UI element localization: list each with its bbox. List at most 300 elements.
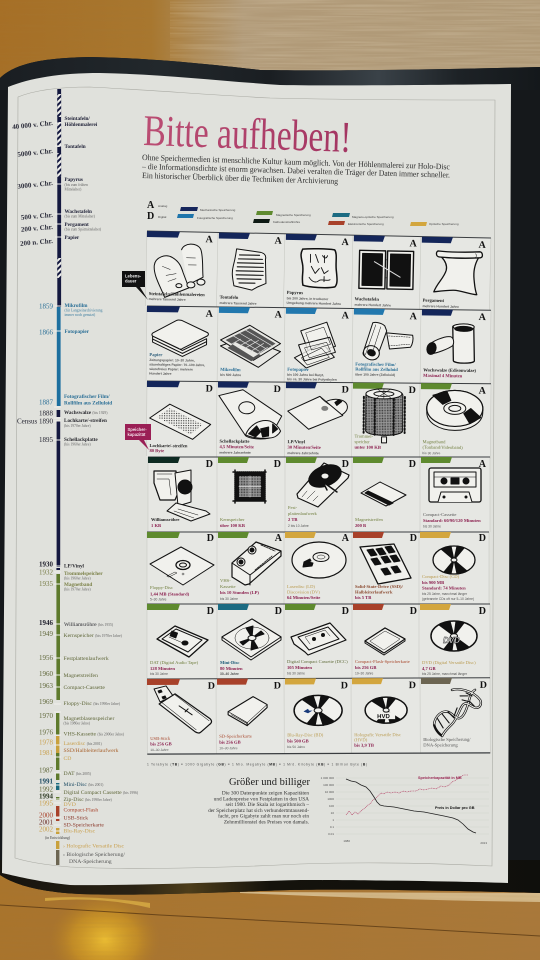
label: bis 10 Stunden (LP) xyxy=(220,590,259,595)
legend: analog and digital keys: D xyxy=(147,211,154,222)
timeline media labels: (bis zum Mittelalter) xyxy=(64,214,96,218)
card: Fotografischer Film xyxy=(353,309,418,377)
label: über 100 KB xyxy=(220,523,245,528)
timeline media labels: Wachstafeln xyxy=(64,209,92,215)
panel: row 1 cards xyxy=(145,231,491,314)
timeline media labels: (bis zum frühen xyxy=(64,183,88,187)
card: DVD: D xyxy=(479,606,486,617)
card: Magnetstreifen: D xyxy=(409,459,416,470)
label: Wachswalze (Edisonwalze) xyxy=(423,367,476,373)
icon: holographic disc xyxy=(365,697,407,723)
card: Wachswalze xyxy=(421,309,487,379)
card: Papyrus xyxy=(285,234,350,306)
card: Tontafeln xyxy=(218,232,283,306)
card: Festplatte: D xyxy=(342,459,349,470)
timeline media labels: Laserdisc (bis 2001) xyxy=(64,741,103,747)
price series xyxy=(346,779,476,833)
card: Wachstafeln xyxy=(352,235,418,308)
label: Trommel- xyxy=(355,434,373,439)
card: SD xyxy=(217,679,281,750)
card: Floppy: D xyxy=(207,533,214,544)
label: mehrere Jahrzehnte xyxy=(219,451,251,455)
line chart: capacity and price xyxy=(321,775,489,845)
icon: paper stack xyxy=(152,320,209,357)
chart description text: und Ladenpreise von Festplatten in den USA xyxy=(214,796,309,802)
label: Standard: 60/90/120 Minuten xyxy=(423,518,481,523)
label: HVD logo: HVD xyxy=(377,714,390,720)
label: DAT (Digital Audio Tape) xyxy=(150,660,198,665)
timeline dates, 19th and 20th century: 2000 xyxy=(39,812,54,820)
label: LP/Vinyl xyxy=(288,439,305,444)
chart description text: Die 300 Datenpunkte zeigen Kapazitäten xyxy=(222,790,309,796)
label: 128 Minuten xyxy=(150,666,175,671)
card: Kernspeicher xyxy=(218,457,281,528)
card: LP/Vinyl xyxy=(285,382,349,456)
card: VHS: A xyxy=(275,533,283,544)
label: Biologische Speicherung/ xyxy=(423,737,471,742)
chart gridlines and axis labels: 0.01 xyxy=(328,832,334,836)
timeline dates, 19th and 20th century: 1995 xyxy=(39,800,54,808)
timeline dates, 19th and 20th century: 1992 xyxy=(39,786,54,794)
label: bis 30 Jahre xyxy=(150,672,168,676)
label: Compact-Cassette xyxy=(423,512,456,517)
timeline media labels: Schellackplatte xyxy=(64,437,98,443)
chart gridlines and axis labels: 100 000 xyxy=(323,783,334,787)
card: Kernspeicher: D xyxy=(274,459,281,470)
chart gridlines and axis labels: 0.1 xyxy=(330,825,334,829)
icon: punched card xyxy=(150,404,211,440)
icon: parchment scroll xyxy=(434,251,482,295)
chart gridlines and axis labels: 10 000 xyxy=(325,790,334,794)
label: 80 Byte xyxy=(149,448,164,453)
callout: Speicherkapazität: kapazität xyxy=(128,432,146,437)
timeline dates, analog era: 3000 v. Chr. xyxy=(17,179,53,191)
label: 4,7 GB xyxy=(422,666,436,671)
chart description text: facht, pro Gigabyte zahlt man nur noch ein xyxy=(218,813,309,820)
timeline dates, analog era: 200 n. Chr. xyxy=(20,237,53,248)
icon: solid state drive xyxy=(360,544,411,584)
label: Wachstafeln xyxy=(355,296,379,302)
label: Solid-State-Drive (SSD)/ xyxy=(355,584,403,589)
timeline dates, 19th and 20th century: 1987 xyxy=(39,766,54,774)
timeline media labels: LP/Vinyl xyxy=(64,564,85,570)
icon: core memory xyxy=(233,470,267,503)
label: bis 256 GB xyxy=(355,665,376,670)
card: Compact-Disc: D xyxy=(479,533,486,544)
card: Festplatte xyxy=(286,457,349,528)
timeline media labels: Williamsröhre (bis 1955) xyxy=(64,622,114,628)
card: HVD: D xyxy=(409,680,416,691)
card: Fotopapier xyxy=(285,308,350,382)
label: bis 500 GB xyxy=(287,738,309,744)
label: Kassette xyxy=(220,584,236,589)
timeline media labels: DVD xyxy=(64,802,76,808)
icon: mini disc xyxy=(222,619,281,660)
label: Tontafeln xyxy=(220,294,238,300)
card: Magnetband xyxy=(420,383,487,456)
label: Mini-Disc xyxy=(220,660,239,665)
timeline media labels: Zip-Disc (bis 1990er Jahre) xyxy=(64,797,113,803)
chart gridlines and axis labels: 1980 xyxy=(343,839,350,843)
card: Compact-Disc xyxy=(420,532,486,601)
label: Williamsröhre xyxy=(151,517,179,522)
label: VHS- xyxy=(220,578,231,583)
card: Laserdisc xyxy=(285,532,350,600)
intro text xyxy=(141,153,450,186)
card: Mikrofilm xyxy=(218,307,283,378)
label: 105 Minuten xyxy=(287,665,312,670)
timeline media labels: Mittelalter) xyxy=(64,187,82,191)
card: USB-Stick: D xyxy=(208,681,215,692)
card: Mikrofilm: A xyxy=(275,310,283,321)
card: DAT xyxy=(147,604,214,676)
legend xyxy=(147,200,459,226)
label: bis 5 TB xyxy=(355,595,371,600)
card: Compact-Flash xyxy=(353,604,417,676)
card: Papier: A xyxy=(206,309,214,320)
label: 2 bis 10 Jahre xyxy=(288,524,309,528)
inner frame line xyxy=(15,87,495,868)
timeline dates, 19th and 20th century: 1978 xyxy=(39,738,54,746)
card: Magnetband: A xyxy=(479,386,487,397)
timeline media labels: (für Langzeitarchivierung xyxy=(64,308,102,312)
card: Blu-Ray: D xyxy=(341,680,348,691)
heading: Größer und billiger: Größer und billiger xyxy=(229,777,311,788)
card: Schellackplatte xyxy=(217,382,282,455)
label: bis 256 GB xyxy=(219,740,241,745)
label: 10–30 Jahre xyxy=(355,672,373,676)
icon: laserdisc xyxy=(292,542,346,578)
icon: film roll xyxy=(361,322,413,363)
timeline media labels: Mikrofilm xyxy=(64,303,88,309)
callout: Speicherkapazität xyxy=(125,424,151,450)
timeline media labels: (bis zum Spätmittelalter) xyxy=(64,228,102,232)
timeline dates, 19th and 20th century: 1976 xyxy=(39,728,54,736)
timeline media labels: VHS-Kassette (bis 2000er Jahre) xyxy=(64,732,125,738)
label: Floppy-Disc xyxy=(150,585,173,590)
label: bis 25 Jahre, manchmal länger xyxy=(422,592,468,596)
label: Magnetstreifen xyxy=(355,517,383,522)
icon: floppy disk xyxy=(150,547,214,585)
icon: Blu-ray disc xyxy=(294,695,342,725)
timeline media labels: Papyrus xyxy=(64,177,83,183)
card: SD: D xyxy=(274,681,281,692)
intro text: Ohne Speichermedien ist menschliche Kultur kaum möglich. Von der Höhlenmalerei zur Holo-Disc xyxy=(142,153,450,171)
label: 2 TB xyxy=(288,517,298,522)
card: Mini-Disc: D xyxy=(275,606,282,617)
timeline media labels: CD xyxy=(64,756,71,762)
timeline dates, analog era: 40 000 v. Chr. xyxy=(12,119,53,131)
card: Tontafeln: A xyxy=(274,236,283,247)
label: Fotografischer Film/ xyxy=(355,362,396,367)
card: HVD xyxy=(352,678,416,748)
capacity series xyxy=(346,775,468,815)
card: Compact-Cassette: A xyxy=(479,459,487,470)
intro text: Ein historischer Überblick über die Techniken der Archivierung xyxy=(142,171,338,186)
timeline media labels: DNA-Speicherung xyxy=(69,859,112,865)
timeline media labels: Floppy-Disc (bis 1990er Jahre) xyxy=(64,701,121,707)
card: Fotopapier: A xyxy=(342,310,350,321)
timeline dates, 19th and 20th century: 1949 xyxy=(39,630,54,638)
label: 4,5 Minuten/Seite xyxy=(219,444,254,449)
panel: row 7 cards xyxy=(147,677,490,755)
label: säurefreies Papier: mehrere xyxy=(149,367,193,372)
timeline media labels: Compact-Flash xyxy=(64,808,98,814)
label: DVD (Digital Versatile Disc) xyxy=(422,660,476,665)
card: Lochkarte: D xyxy=(206,383,213,395)
legend: storage types xyxy=(177,207,459,226)
icon: hard disk xyxy=(297,460,349,507)
label: 1,44 MB (Standard) xyxy=(150,592,190,596)
card: Mini-Disc xyxy=(218,604,282,676)
legend: storage types: Optische Speicherung xyxy=(429,222,459,226)
timeline dates, 19th and 20th century: 1946 xyxy=(39,619,54,627)
label: bis ca. 30 Jahre bei Polyethylen xyxy=(287,377,337,382)
label: (Tonband/Videoband) xyxy=(422,445,463,450)
card: Compact-Flash: D xyxy=(410,606,417,617)
chart gridlines and axis labels: 10 xyxy=(331,811,334,815)
card: DVD xyxy=(420,604,486,676)
card: Schellackplatte: D xyxy=(274,384,281,395)
timeline dates, 19th and 20th century: 1981 xyxy=(39,749,54,757)
timeline media labels: DAT (bis 2005) xyxy=(64,771,92,777)
timeline media labels: › Biologische Speicherung/ xyxy=(63,852,125,858)
card: Floppy xyxy=(147,532,214,602)
card: Fotografischer Film: A xyxy=(410,311,418,322)
label: Lochkarte/-streifen xyxy=(149,443,187,448)
label: bis 3,9 TB xyxy=(354,743,374,748)
legend: storage types: Magnetische Speicherung xyxy=(276,213,311,217)
timeline media labels: Blu-Ray-Disc xyxy=(64,828,96,834)
label: 200 B xyxy=(355,523,366,528)
timeline dates, 19th and 20th century: 1887 xyxy=(39,398,54,406)
timeline media labels xyxy=(45,116,139,865)
legend: storage types: Mechanische Speicherung xyxy=(200,208,236,212)
unit conversion line: 1 Terabyte (TB) ≡ 1000 Gigabyte (GB) ≡ 1 Mio. Megabyte (MB) ≡ 1 Mrd. Kilobyte (KB) ≡ 1 Billion Byte (B) xyxy=(147,762,367,766)
icon: SD card xyxy=(228,697,267,726)
label: bis 900 MB xyxy=(422,580,444,585)
chart gridlines and axis labels: 1 000 000 xyxy=(321,776,334,780)
label: SD-Speicherkarte xyxy=(219,734,252,739)
timeline dates, 19th and 20th century: 1895 xyxy=(39,436,54,444)
icon: microfilm sheets xyxy=(220,325,281,368)
icon: VHS cassette xyxy=(232,542,281,585)
timeline media labels: Pergament xyxy=(64,222,89,228)
label: Mikrofilm xyxy=(220,367,241,372)
label: 1 KB xyxy=(151,523,161,528)
label: Blu-Ray-Disc (BD) xyxy=(287,732,323,738)
card: Laserdisc: A xyxy=(342,533,350,544)
label: Discovision (DV) xyxy=(287,590,320,594)
card: USB-Stick xyxy=(147,679,215,752)
icon: wax cylinders xyxy=(425,323,475,363)
label: Kernspeicher xyxy=(220,517,244,522)
chart description text xyxy=(208,790,309,826)
timeline dates, 19th and 20th century: 1991 xyxy=(39,778,54,786)
timeline media labels: Lochkarte/-streifen xyxy=(64,418,107,424)
timeline media labels: (bis 1980er Jahre) xyxy=(64,722,91,726)
chart gridlines and axis labels: 100 xyxy=(329,804,334,808)
paper page xyxy=(2,73,511,885)
chart gridlines and axis labels: 2013 xyxy=(480,841,487,845)
chart gridlines and axis labels: 1 xyxy=(332,818,334,822)
label: über 100 Jahre (Zelluloid) xyxy=(355,373,395,377)
callout: Lebensdauer: Lebens- xyxy=(125,274,141,278)
card: VHS xyxy=(218,532,283,601)
label: Papier xyxy=(149,352,162,357)
timeline media labels: Höhlenmalerei xyxy=(64,122,98,128)
timeline dates, 19th and 20th century: 1970 xyxy=(39,712,54,720)
panel: timeline xyxy=(12,89,139,865)
card: Blu-Ray xyxy=(285,678,348,749)
callout: Speicherkapazität: Speicher- xyxy=(128,427,147,432)
label: Laserdisc (LD) xyxy=(287,584,315,589)
label: bis 256 GB xyxy=(150,741,172,746)
label: speicher xyxy=(355,439,370,444)
label: bis 30 Jahre xyxy=(422,451,441,455)
label: Magnetband xyxy=(423,439,446,444)
label: 30–40 Jahre xyxy=(220,672,239,676)
timeline dates, 19th and 20th century: 1932 xyxy=(39,568,54,576)
label: Holografic Versatile Disc xyxy=(354,732,401,737)
label: Halbleiterlaufwerk xyxy=(355,590,393,594)
timeline media labels: USB-Stick xyxy=(64,816,88,822)
card: Williamsröhre: D xyxy=(206,459,213,470)
timeline media labels: Papier xyxy=(64,235,80,241)
panel: row 4 cards xyxy=(148,456,490,532)
label: 80 Minuten xyxy=(220,666,243,671)
timeline media labels: Fotografischer Film/ xyxy=(64,394,110,400)
timeline media labels: Mini-Disc (bis 2001) xyxy=(64,782,104,788)
timeline media labels: Digital Compact Cassette (bis 1996) xyxy=(64,790,139,796)
label: Hundert Jahre xyxy=(149,372,172,376)
label: mehrere Tausend Jahre xyxy=(149,297,186,302)
label: 10–30 Jahre xyxy=(219,746,238,750)
chart gridlines and axis labels xyxy=(321,776,489,845)
callout: Lebensdauer: dauer xyxy=(125,278,137,284)
icon: clay tablet xyxy=(232,249,267,290)
panel: row 5 cards xyxy=(147,532,489,604)
card: DAT: D xyxy=(207,606,214,617)
icon: wax tablets xyxy=(359,250,414,289)
timeline dates, 19th and 20th century: 1866 xyxy=(39,328,54,336)
icon: digital compact cassette xyxy=(291,623,346,655)
icon: vinyl record in sleeve xyxy=(288,396,348,430)
label: bis 200 Jahre, in trockener xyxy=(287,296,329,301)
card: Wachswalze: A xyxy=(479,312,487,323)
callout: Lebensdauer xyxy=(122,271,148,300)
label: Digital Compact Cassette (DCC) xyxy=(287,659,348,664)
timeline bar xyxy=(54,89,62,865)
timeline media labels: Magnetblasenspeicher xyxy=(64,716,114,722)
card: Steintafeln: A xyxy=(205,234,214,245)
timeline dates, 19th and 20th century: 1956 xyxy=(39,654,54,662)
card: Papier xyxy=(146,306,214,376)
timeline media labels: Festplattenlaufwerk xyxy=(64,655,109,662)
card: Pergament xyxy=(420,237,487,309)
timeline dates, 19th and 20th century: 1960 xyxy=(39,670,54,678)
chart gridlines and axis labels: 1000 xyxy=(327,797,334,801)
timeline media labels: (bis 1960er Jahre) xyxy=(64,442,91,446)
timeline dates, 19th and 20th century: 1994 xyxy=(39,792,54,800)
label: Rollfilm aus Zelluloid xyxy=(355,367,398,372)
timeline media labels: Kernspeicher (bis 1970er Jahre) xyxy=(64,633,123,639)
card: Trommelspeicher xyxy=(352,383,416,450)
card: Williamsröhre xyxy=(148,457,213,528)
timeline media labels: SD-Speicherkarte xyxy=(64,822,104,828)
timeline media labels: › Holografic Versatile Disc xyxy=(63,842,124,850)
card: Magnetstreifen xyxy=(353,457,416,528)
icon: USB stick xyxy=(154,686,212,733)
timeline media labels: Compact-Cassette xyxy=(64,685,105,691)
legend: analog and digital keys: Digital xyxy=(158,215,167,219)
icon: compact cassette xyxy=(429,468,481,502)
label: bis 25 Jahre, manchmal länger xyxy=(422,672,468,676)
icon: stone tablets xyxy=(154,243,206,298)
label: 10–30 Jahre xyxy=(150,748,169,752)
timeline dates, analog era: 500 v. Chr. xyxy=(21,211,53,222)
legend: storage types: Magneto-optische Speicherung xyxy=(352,215,394,219)
legend: storage types: Kathodenstrahlröhre xyxy=(273,220,301,224)
label: (HVD) xyxy=(354,737,368,742)
icon: magnetic stripe card xyxy=(361,482,406,506)
label: bis 500 Jahre xyxy=(220,373,241,377)
card: Wachstafeln: A xyxy=(409,238,418,250)
card: LP/Vinyl: D xyxy=(342,385,349,396)
timeline dates, 19th and 20th century: 2001 xyxy=(39,818,54,826)
label: (gebrannte CDs oft nur 5–10 Jahre) xyxy=(422,597,474,601)
label: DVD logo: DVD xyxy=(443,636,460,645)
card: SSD xyxy=(353,532,417,600)
timeline media labels: (bis 1970er Jahre) xyxy=(64,424,91,428)
legend: storage types: Fotografische Speicherung xyxy=(197,216,233,220)
label: plattenlaufwerk xyxy=(288,511,318,516)
card: SSD: D xyxy=(410,533,417,544)
legend: storage types: Elektronische Speicherung xyxy=(348,222,384,226)
timeline dates, 19th and 20th century: Census 1890 xyxy=(17,418,53,426)
timeline media labels: (in Entwicklung) xyxy=(45,836,71,840)
label: Compact-Flash-Speicherkarte xyxy=(355,659,410,664)
icon: compact disc xyxy=(433,546,475,574)
label: bis 30 Jahre xyxy=(220,597,238,601)
icon: shellac record in sleeve xyxy=(219,390,282,439)
card: Trommelspeicher: D xyxy=(409,385,416,396)
timeline media labels: Magnetstreifen xyxy=(64,672,98,679)
card: DNA xyxy=(421,678,487,748)
chart description text: Zehnmillionstel des Preises von damals. xyxy=(224,820,309,826)
legend: analog and digital keys: Analog xyxy=(158,204,168,208)
card: Compact-Cassette xyxy=(421,457,487,528)
timeline dates, 19th and 20th century: 1969 xyxy=(39,698,54,706)
card: DCC xyxy=(285,604,349,676)
label: Maximal 4 Minuten xyxy=(423,373,463,378)
timeline dates, 19th and 20th century: 1888 xyxy=(39,410,54,418)
timeline media labels: immer noch genutzt) xyxy=(64,313,96,317)
label: mehrere Jahrzehnte xyxy=(287,451,319,455)
label: unter 100 KB xyxy=(354,445,381,450)
label: Compact-Disc (CD) xyxy=(422,574,459,579)
label: mehrere Hundert Jahre xyxy=(354,303,391,307)
label: mehrere Tausend Jahre xyxy=(220,301,257,306)
label: Zeitungspapier: 10–20 Jahre, xyxy=(149,358,195,363)
card: DCC: D xyxy=(342,606,349,617)
label: Pergament xyxy=(423,298,444,303)
label: bis 100 Jahre bei Baryt, xyxy=(287,373,324,377)
title: Bitte aufheben! xyxy=(143,106,352,162)
card: Pergament: A xyxy=(478,240,487,251)
chart description text: seit 1980. Die Skala ist logarithmisch – xyxy=(226,802,309,808)
timeline media labels: Tontafeln xyxy=(64,144,86,150)
